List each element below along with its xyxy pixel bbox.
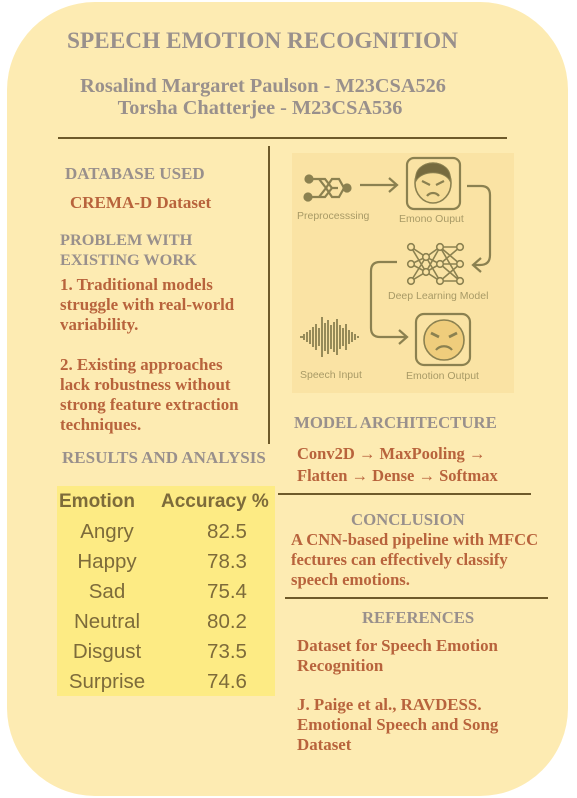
table: emotion accuracy: Emotion: [59, 491, 135, 512]
label: speech input: Speech Input: [300, 369, 362, 381]
label: emono output: Emono Ouput: [399, 213, 464, 225]
text: problems list: strong feature extraction: [60, 395, 239, 414]
icon: emotion output: [416, 314, 470, 365]
text: problems list: struggle with real-world: [60, 295, 234, 314]
text: references body: Recognition: [297, 656, 383, 675]
text: conclusion body: speech emotions.: [291, 570, 410, 589]
arrow: model to emotion output: [371, 262, 407, 344]
text: problems list: 2. Existing approaches: [60, 355, 223, 374]
text: problems list: variability.: [60, 315, 138, 334]
table: emotion accuracy: Surprise: [69, 670, 145, 693]
table: emotion accuracy: 73.5: [207, 640, 247, 663]
text: conclusion body: [291, 530, 538, 589]
table: emotion accuracy: Disgust: [73, 640, 141, 663]
text: references body: [297, 636, 498, 754]
table: emotion accuracy: 82.5: [207, 520, 247, 543]
authors: [80, 75, 446, 119]
diagram: model pipeline: [292, 153, 514, 393]
text: conclusion body: fectures can effectively classify: [291, 550, 508, 569]
text: architecture flow: [297, 444, 498, 485]
table: emotion accuracy: [57, 486, 275, 696]
table: emotion accuracy: 80.2: [207, 610, 247, 633]
heading: conclusion: CONCLUSION: [351, 510, 465, 529]
text: references body: J. Paige et al., RAVDESS.: [297, 695, 482, 714]
text: conclusion body: A CNN-based pipeline with MFCC: [291, 530, 538, 549]
label: preprocessing: Preprocesssing: [297, 210, 370, 222]
label: emotion output: Emotion Output: [406, 370, 479, 382]
heading: results and analysis: RESULTS AND ANALYSIS: [62, 448, 266, 467]
title: SPEECH EMOTION RECOGNITION: [67, 28, 458, 54]
table: emotion accuracy: Angry: [80, 520, 134, 543]
heading: model architecture: MODEL ARCHITECTURE: [294, 413, 497, 432]
icon: neural network: [408, 244, 463, 284]
heading: problem with existing work: PROBLEM WITH: [60, 230, 192, 249]
text: references body: Dataset: [297, 735, 351, 754]
label: deep learning model: Deep Learning Model: [388, 290, 488, 302]
text: references body: Dataset for Speech Emotion: [297, 636, 498, 655]
table: emotion accuracy: 78.3: [207, 550, 247, 573]
heading: problem with existing work: EXISTING WORK: [60, 250, 197, 269]
arrow: output to model: [467, 186, 490, 272]
arrow: preprocessing to output: [360, 178, 397, 192]
text: dataset name: CREMA-D Dataset: [70, 193, 211, 212]
heading: problem with existing work: [60, 230, 197, 269]
table: emotion accuracy: Accuracy %: [161, 491, 269, 512]
text: problems list: lack robustness without: [60, 375, 231, 394]
text: problems list: techniques.: [60, 415, 141, 434]
heading: database used: DATABASE USED: [65, 164, 205, 183]
text: problems list: 1. Traditional models: [60, 275, 213, 294]
text: references body: Emotional Speech and Song: [297, 715, 498, 734]
text: architecture flow: Conv2D → MaxPooling →: [297, 444, 485, 463]
table: emotion accuracy: 75.4: [207, 580, 247, 603]
table: emotion accuracy: 74.6: [207, 670, 247, 693]
heading: references: REFERENCES: [362, 608, 474, 627]
icon: speech waveform: [300, 317, 358, 357]
table: emotion accuracy: Neutral: [74, 610, 140, 633]
authors: Torsha Chatterjee - M23CSA536: [118, 97, 402, 119]
icon: face box: [407, 158, 460, 209]
table: emotion accuracy: Sad: [89, 580, 125, 603]
text: problems list: [60, 275, 239, 434]
text: architecture flow: Flatten → Dense → Softmax: [297, 466, 498, 485]
icon: preprocessing: [304, 176, 350, 200]
authors: Rosalind Margaret Paulson - M23CSA526: [80, 75, 446, 97]
table: emotion accuracy: Happy: [77, 550, 137, 573]
